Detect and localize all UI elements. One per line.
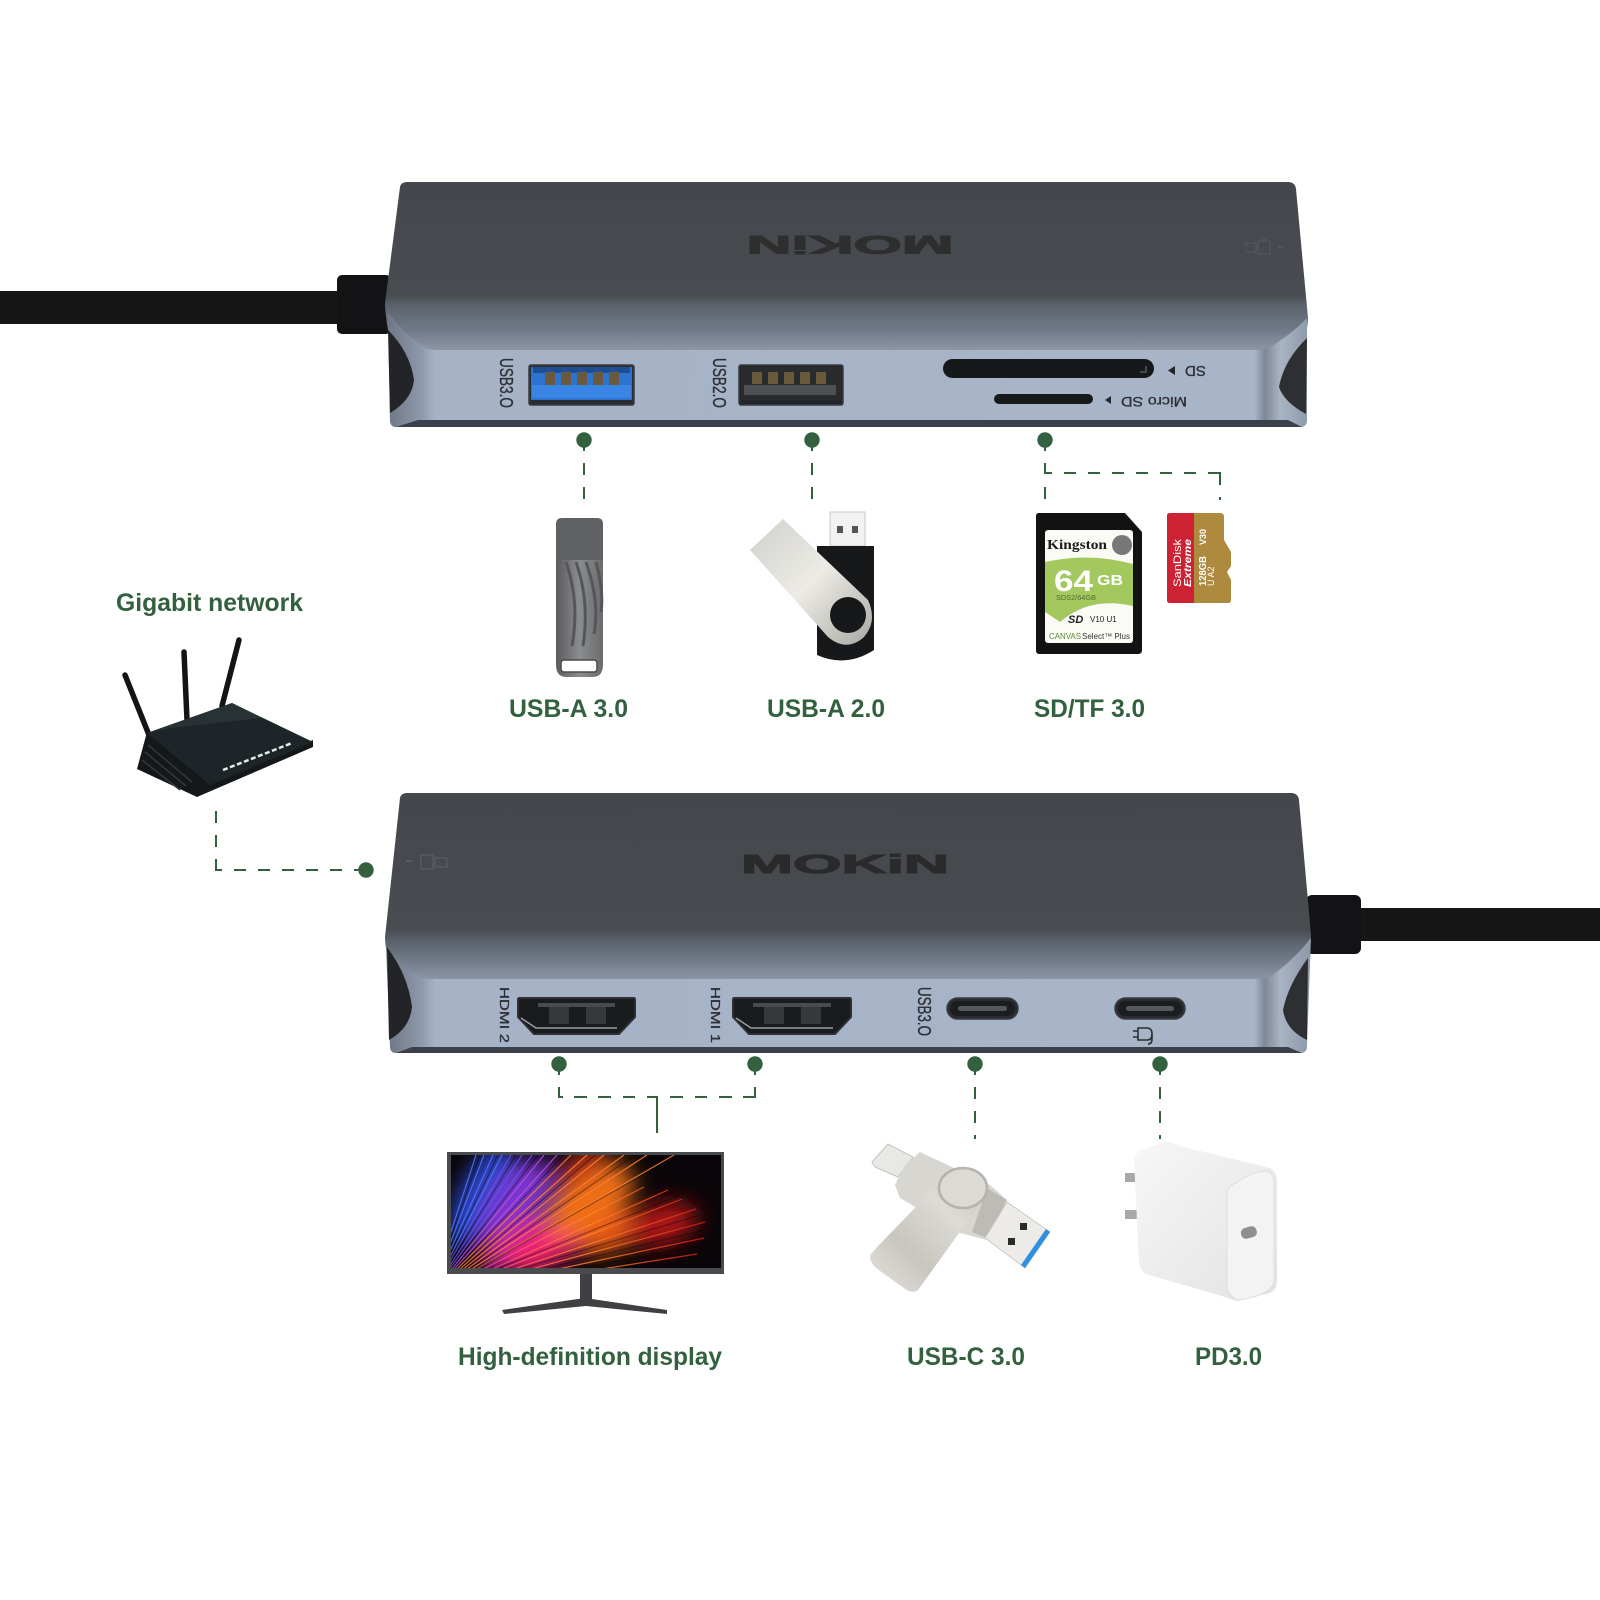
top hub device: [0, 182, 1308, 427]
icon: USB-C swivel drive: [870, 1144, 1050, 1292]
connector: network: [216, 811, 374, 878]
USB3.0 label: USB3.O: [914, 987, 934, 1036]
label: USB-A 2.0: USB-A 2.0: [767, 695, 885, 723]
icon: SD card: CANVAS: [1049, 632, 1081, 641]
SD slot: [943, 359, 1154, 378]
monitor stand: [502, 1274, 667, 1314]
USB 2.0 port: [739, 365, 843, 405]
SD label: SD: [1185, 362, 1206, 379]
HDMI 2 label: HDMI 2: [497, 987, 512, 1043]
icon: SD card: Select™ Plus: [1082, 632, 1130, 641]
MOKiN logo: MOKiN: [741, 849, 949, 879]
top hub cable: [0, 275, 391, 334]
PD USB-C port: [1115, 998, 1185, 1019]
micro SD slot: [994, 394, 1093, 404]
icon: microSD card: Extreme: [1183, 538, 1194, 587]
icon: SD card: [1036, 513, 1142, 654]
icon: USB-A 3.0 drive: [556, 518, 603, 677]
icon: SD card: GB: [1097, 572, 1123, 589]
connector: USB-C: [967, 1056, 983, 1139]
USB-C port: [947, 998, 1018, 1019]
icon: SD card: SDS2/64GB: [1056, 595, 1096, 602]
HDMI 1 label: HDMI 1: [708, 987, 723, 1043]
connector: USB-A 2.0: [804, 432, 820, 499]
icon: microSD card: [1167, 513, 1231, 603]
icon: plug mark: [1133, 1028, 1152, 1044]
bottom hub body: [385, 793, 1311, 1053]
connector: HDMI pair to display: [551, 1056, 763, 1133]
ethernet mark: [1246, 239, 1284, 254]
ethernet mark: [406, 855, 447, 869]
icon: charger: [1125, 1142, 1277, 1301]
bottom hub cable: [1306, 895, 1600, 954]
USB3.0 label: USB3.O: [496, 358, 516, 408]
top hub body: [385, 182, 1308, 427]
icon: microSD card: SanDisk: [1172, 538, 1184, 587]
dark streaks: [451, 1155, 704, 1268]
icon: microSD card: 128GB: [1198, 556, 1209, 586]
HDMI 2 port: [518, 998, 635, 1034]
Micro SD label: Micro SD: [1121, 394, 1187, 410]
label: PD3.0: PD3.0: [1195, 1343, 1262, 1371]
bottom hub device: [385, 793, 1600, 1053]
label: SD/TF 3.0: SD/TF 3.0: [1034, 695, 1145, 723]
connector: PD: [1152, 1056, 1168, 1139]
light rays: [451, 1155, 706, 1268]
icon: SD card: 64: [1054, 565, 1093, 598]
USB2.0 label: USB2.O: [709, 358, 729, 408]
icon: USB-A 2.0 swivel drive: [750, 512, 874, 660]
connector: SD/TF: [1037, 432, 1220, 500]
SD label: [1168, 362, 1206, 379]
connector: USB-A 3.0: [576, 432, 592, 499]
icon: SD card: V10 U1: [1090, 615, 1117, 624]
label: USB-A 3.0: USB-A 3.0: [509, 695, 628, 723]
label: Gigabit network: Gigabit network: [116, 589, 303, 617]
icon: microSD card: V30: [1198, 529, 1208, 545]
label: USB-C 3.0: USB-C 3.0: [907, 1343, 1025, 1371]
label: High-definition display: High-definition display: [458, 1343, 722, 1371]
icon: SD card: SD: [1068, 614, 1083, 626]
icon: monitor: [447, 1152, 724, 1314]
HDMI 1 port: [733, 998, 851, 1034]
MOKiN logo, upside down: MOKiN: [746, 230, 954, 258]
icon: microSD card: U A2: [1206, 566, 1216, 586]
icon: router: [125, 640, 313, 797]
USB 3.0 port: [529, 365, 634, 405]
Kingston brand: Kingston: [1047, 538, 1107, 553]
